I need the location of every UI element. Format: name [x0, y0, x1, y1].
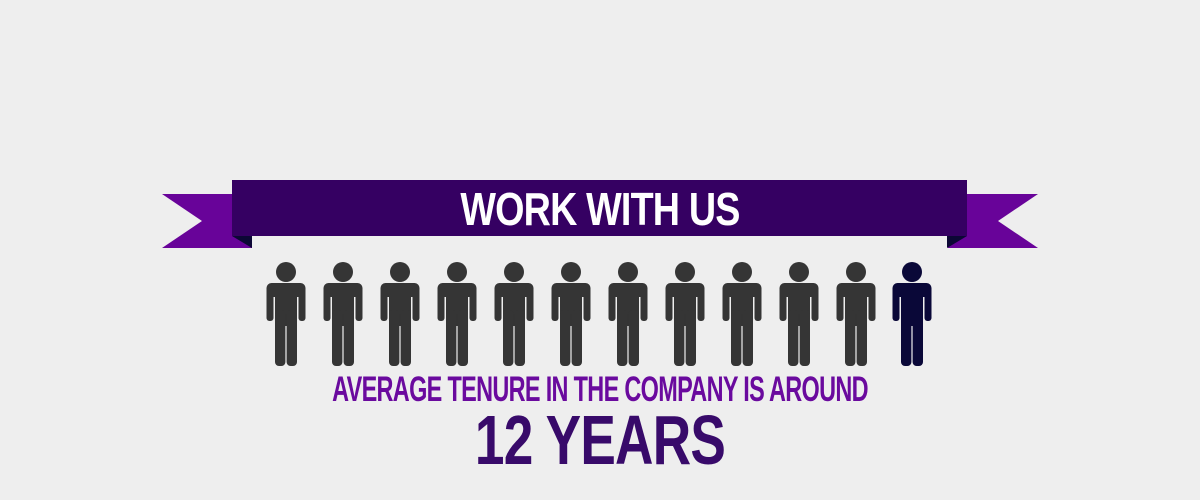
subtitle text: AVERAGE TENURE IN THE COMPANY IS AROUND [332, 370, 868, 409]
big number: 12 YEARS [475, 401, 725, 479]
title: WORK WITH US [460, 183, 740, 235]
people icons row [266, 262, 932, 366]
